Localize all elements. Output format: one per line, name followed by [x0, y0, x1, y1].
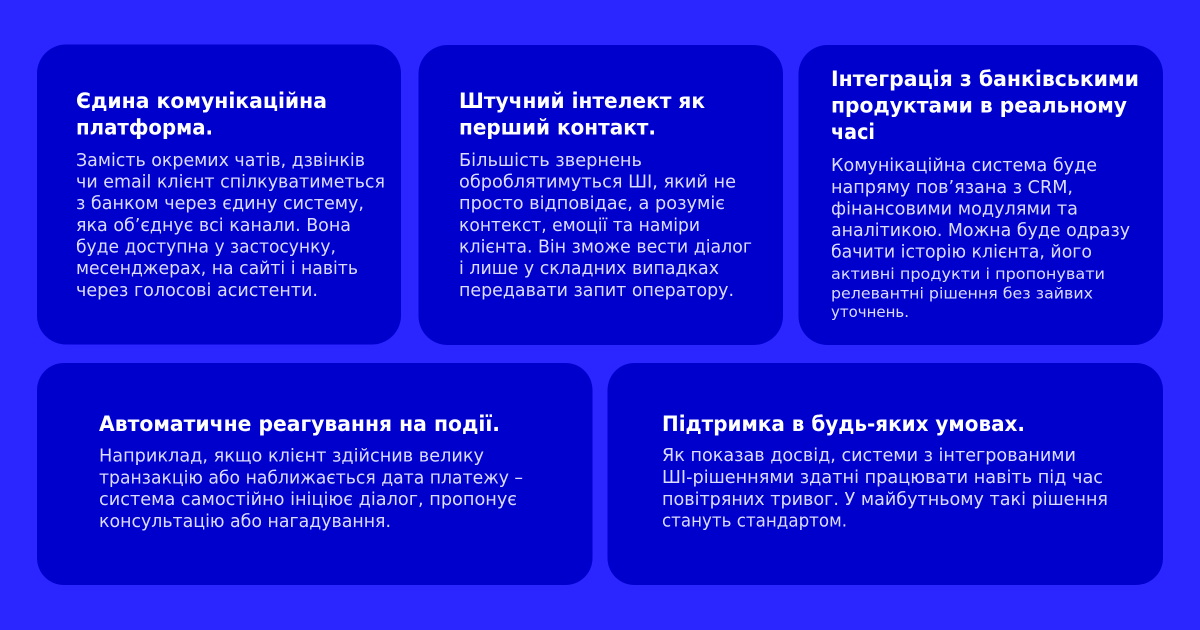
text block: automatic response description [99, 446, 523, 532]
panel: support in any conditions [608, 363, 1163, 585]
text block: support description: Як показав досвід, системи з інтегрованими [662, 446, 1076, 466]
text block: unified platform description: буде доступна у застосунку, [76, 238, 336, 258]
text block: unified platform description: Замість окремих чатів, дзвінків [76, 151, 365, 171]
text block: AI first contact description: і лише у складних випадках [459, 259, 719, 279]
text block: support description: стануть стандартом. [662, 512, 847, 532]
text block: banking integration description: напряму пов’язана з CRM, [831, 178, 1073, 198]
text block: support description [662, 446, 1108, 532]
text block: AI first contact description: просто відповідає, а розуміє [459, 194, 725, 214]
text block: AI first contact description: контекст, емоції та наміри [459, 216, 700, 236]
text block: AI first contact description: Більшість звернень [459, 151, 642, 171]
text block: automatic response description: система самостійно ініціює діалог, пропонує [99, 490, 517, 510]
text block: AI first contact description: оброблятимуться ШІ, який не [459, 172, 736, 192]
text block: unified platform description: чи email клієнт спілкуватиметься [76, 172, 385, 192]
heading: AI first contact [459, 89, 705, 140]
panel: unified communication platform [37, 44, 401, 344]
text block: unified platform description: месенджерах, на сайті і навіть [76, 259, 358, 279]
text block: banking integration description: фінансовими модулями та [831, 200, 1078, 220]
heading: AI first contact: перший контакт. [459, 116, 656, 140]
heading: banking integration: Інтеграція з банківськими [831, 67, 1139, 92]
heading: support: Підтримка в будь-яких умовах. [662, 412, 1025, 437]
text block: automatic response description: Наприклад, якщо клієнт здійснив велику [99, 446, 484, 466]
text block: banking integration description: уточнень. [831, 303, 909, 321]
text block: AI first contact description [459, 151, 752, 301]
heading: AI first contact: Штучний інтелект як [459, 89, 705, 114]
panel: banking product integration [798, 45, 1163, 345]
panel: AI as first contact [418, 45, 783, 345]
heading: unified platform [76, 89, 327, 140]
text block: AI first contact description: передавати запит оператору. [459, 281, 734, 301]
heading: banking integration: часі [831, 120, 875, 145]
heading: unified platform: Єдина комунікаційна [76, 89, 327, 114]
text block: banking integration description [831, 156, 1130, 321]
text block: banking integration description: Комунікаційна система буде [831, 156, 1097, 176]
text block: unified platform description: з банком через єдину систему, [76, 194, 364, 214]
text block: support description: ШІ-рішеннями здатні працювати навіть під час [662, 468, 1103, 488]
text block: support description: повітряних тривог. У майбутньому такі рішення [662, 490, 1108, 510]
text block: banking integration description: релевантні рішення без зайвих [831, 284, 1093, 302]
text block: unified platform description [76, 151, 385, 301]
heading: banking integration [831, 67, 1139, 145]
heading: automatic response: Автоматичне реагування на події. [99, 412, 500, 437]
text block: banking integration description: бачити історію клієнта, його [831, 242, 1092, 262]
panel: automatic event response [37, 363, 592, 585]
text block: automatic response description: транзакцію або наближається дата платежу – [99, 468, 523, 488]
heading: unified platform: платформа. [76, 116, 213, 140]
text block: unified platform description: через голосові асистенти. [76, 281, 318, 301]
text block: unified platform description: яка об’єднує всі канали. Вона [76, 216, 351, 236]
text block: AI first contact description: клієнта. Він зможе вести діалог [459, 238, 752, 258]
text block: banking integration description: аналітикою. Можна буде одразу [831, 221, 1130, 241]
heading: banking integration: продуктами в реальному [831, 94, 1127, 118]
text block: automatic response description: консультацію або нагадування. [99, 512, 391, 532]
text block: banking integration description: активні продукти і пропонувати [831, 265, 1105, 283]
